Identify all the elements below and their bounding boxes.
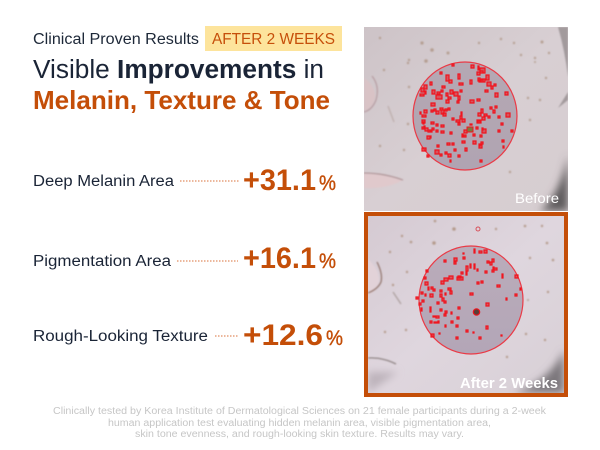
footnote: skin tone evenness, and rough-looking skin texture. Results may vary. [135,429,464,440]
footnote: Clinically tested by Korea Institute of Dermatological Sciences on 21 female participants during a 2-week [53,406,547,417]
stat row: rough-looking texture [33,319,343,352]
decorative freckles [379,37,550,173]
stat row: rough-looking texture: % [326,327,343,350]
decorative freckles [384,220,554,358]
stat row: rough-looking texture: +12.6 [243,319,323,352]
overlay: after analysis circle [416,246,523,354]
stat row: rough-looking texture: Rough-Looking Texture [33,328,208,345]
label: before: Before [515,190,559,206]
tag: after 2 weeks: AFTER 2 WEEKS [212,31,335,48]
photo: before [364,27,568,211]
stat row: pigmentation area: % [319,250,336,273]
heading: visible improvements: Visible Improvements in [33,56,324,84]
stat row: deep melanin area: Deep Melanin Area [33,173,174,190]
subtitle: Clinical Proven Results: Clinical Proven Results [33,31,199,48]
footnote [53,406,547,440]
heading: melanin, texture and tone: Melanin, Texture & Tone [33,85,330,115]
stat row: pigmentation area [33,242,336,275]
stat row: pigmentation area: Pigmentation Area [33,253,171,270]
stat row: pigmentation area: +16.1 [243,242,316,275]
stat row: deep melanin area: +31.1 [243,164,316,197]
stat row: deep melanin area [33,164,336,197]
label: after 2 weeks: After 2 Weeks [460,376,558,392]
stat row: deep melanin area: % [319,172,336,195]
photo: after 2 weeks [364,212,568,397]
tag: after 2 weeks [205,26,342,51]
footnote: human application test evaluating hidden melanin area, visible pigmentation area, [108,418,491,429]
overlay: before analysis circle [413,62,517,170]
